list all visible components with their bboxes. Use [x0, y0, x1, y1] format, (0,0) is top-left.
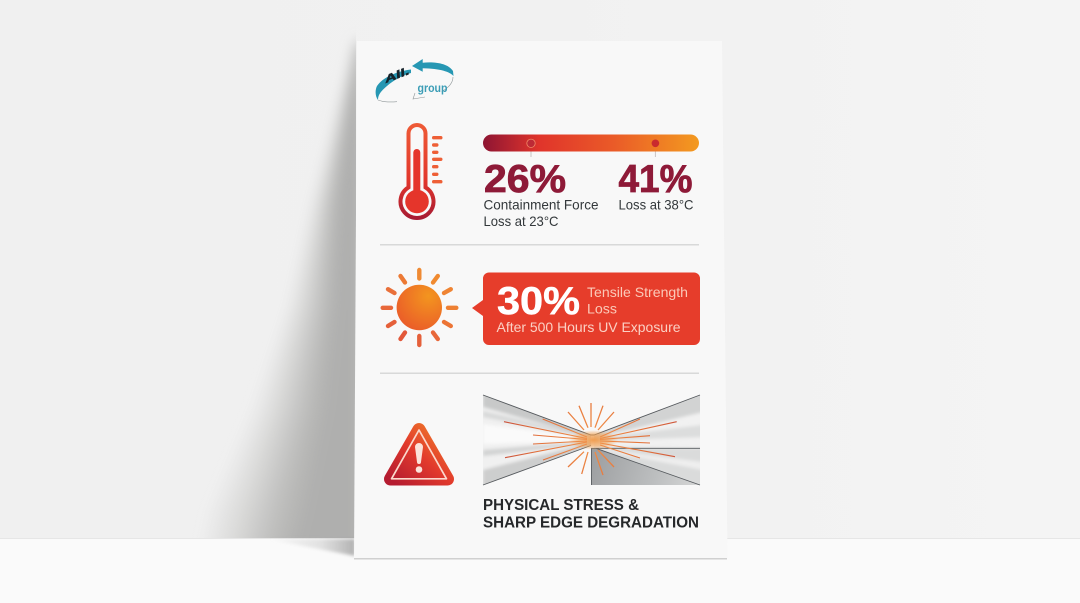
stretched material right: [595, 396, 700, 484]
callout label: tensile strength loss: Loss: [587, 300, 617, 316]
logo swoosh: [376, 59, 454, 102]
stat: 26%: 26%: [484, 158, 566, 201]
callout label: tensile strength loss: Tensile Strength: [587, 284, 688, 300]
stretched material left: [483, 392, 594, 488]
icon: thermometer: [400, 125, 442, 218]
poster card: [354, 41, 728, 558]
callout caption: After 500 Hours UV Exposure: [496, 319, 681, 335]
logo: Alls group: [376, 59, 454, 102]
callout: UV exposure: [472, 272, 700, 345]
logo word: group: group: [418, 81, 448, 95]
callout number: 30%: 30%: [497, 280, 580, 323]
marker: 23C: [527, 139, 535, 157]
stat label: loss at 38C: Loss at 38°C: [618, 196, 694, 212]
card shadow on wall and floor: [198, 42, 727, 570]
stat: 26%: [484, 158, 599, 229]
illustration: material stress at sharp edge: [483, 392, 703, 488]
heading: physical stress and sharp edge degradation: SHARP EDGE DEGRADATION: [483, 514, 699, 532]
icon: sun: [383, 270, 456, 345]
stat label: containment force loss at 23C: Containment Force: [484, 196, 599, 212]
stat: 41%: 41%: [618, 158, 692, 201]
edge outlines: [483, 395, 700, 485]
heading: physical stress and sharp edge degradation: PHYSICAL STRESS &: [483, 497, 639, 514]
marker: 38C: [652, 140, 659, 157]
stat label: containment force loss at 23C: Loss at 23°C: [484, 213, 558, 229]
temperature gradient bar: [483, 134, 699, 157]
stress burst lines: [504, 403, 677, 475]
icon: warning triangle: [390, 430, 448, 479]
sharp edge block: [592, 448, 700, 485]
logo word: All: All.: [381, 65, 411, 86]
